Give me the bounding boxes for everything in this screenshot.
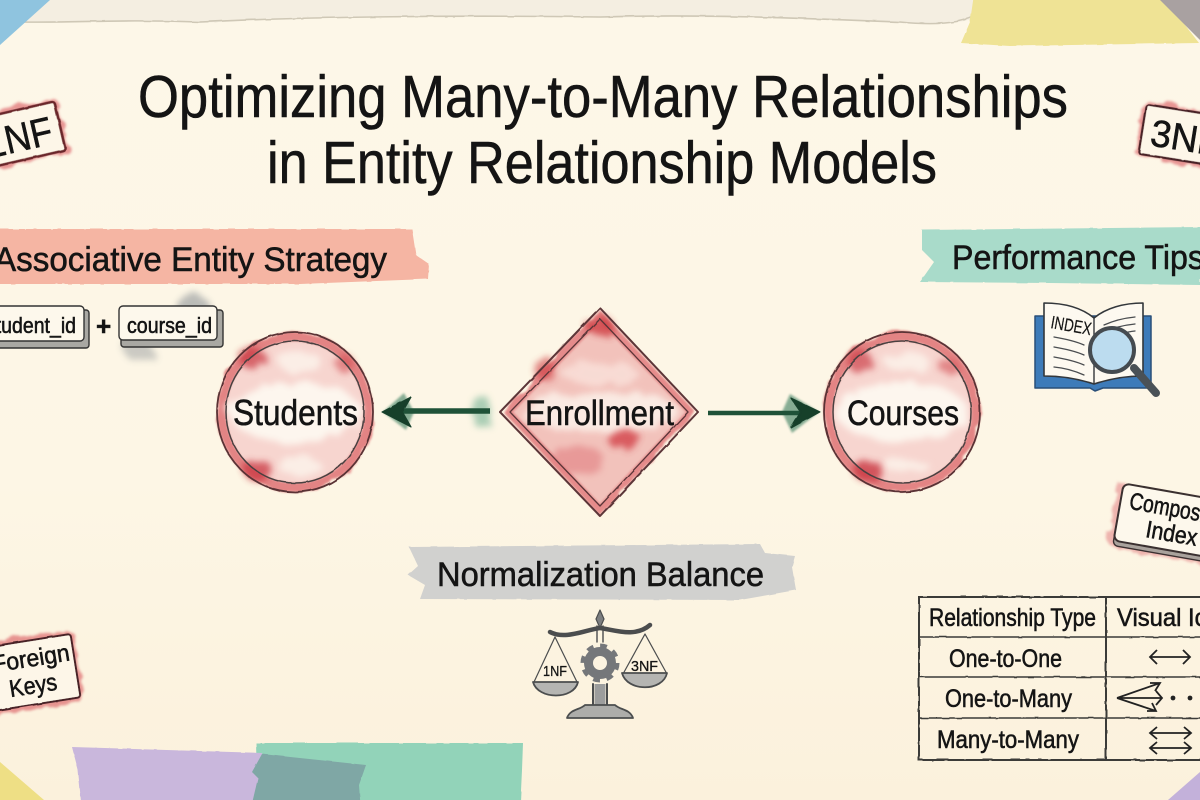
icon: balance scale with gear: 3NF <box>631 658 658 675</box>
tape: grey corner <box>1160 0 1200 40</box>
title: Optimizing Many-to-Many Relationships <box>138 64 1068 130</box>
stamp: 3NF <box>1139 104 1200 169</box>
table header: Relationship Type <box>929 604 1096 632</box>
torn paper top edge <box>0 0 980 24</box>
entity: Courses: Courses <box>847 394 959 433</box>
arrow: Enrollment to Students <box>383 393 493 430</box>
callout: Foreign Keys: Keys <box>7 669 59 703</box>
entity: Students <box>217 332 373 492</box>
entity: Students: Students <box>233 392 358 433</box>
entity: Enrollment: Enrollment <box>525 394 674 433</box>
icon: balance scale with gear: 1NF <box>543 663 567 680</box>
tape: teal bottom <box>256 743 523 800</box>
row: One-to-Many <box>945 683 1192 713</box>
callout: Foreign Keys <box>0 634 81 711</box>
icon: balance scale with gear <box>533 610 667 718</box>
tape: yellow bottom left <box>0 762 44 800</box>
key chip: student_id <box>0 306 89 348</box>
row: One-to-Many: One-to-Many <box>945 685 1072 713</box>
row: One-to-One: One-to-One <box>949 645 1062 673</box>
banner: Associative Entity Strategy: Associative Entity Strategy <box>0 241 387 279</box>
entity: Enrollment <box>500 308 698 516</box>
tape: overlap <box>250 754 366 800</box>
arrow: Enrollment to Courses <box>708 394 819 433</box>
key chip: course_id <box>119 306 223 347</box>
row: Many-to-Many <box>937 726 1191 754</box>
banner: Associative Entity Strategy <box>0 229 429 284</box>
tape: purple corner bottom right <box>1168 772 1200 800</box>
key chip: course_id: course_id <box>127 313 212 338</box>
banner: Normalization Balance: Normalization Balance <box>437 556 764 594</box>
icon: index book with magnifier: INDEX <box>1049 312 1093 339</box>
plus sign: + <box>96 311 111 341</box>
tape: yellow top right <box>961 0 1199 46</box>
tape: purple bottom <box>72 747 262 800</box>
table: relationship types <box>919 597 1200 760</box>
tape: blue corner <box>0 0 50 45</box>
icon: index book with magnifier <box>1035 303 1156 393</box>
composite key chips <box>0 294 223 359</box>
entity: Courses <box>824 332 980 492</box>
title <box>138 64 1068 196</box>
banner: Performance Tips <box>920 227 1200 285</box>
banner: Normalization Balance <box>408 544 796 600</box>
title: in Entity Relationship Models <box>267 130 937 196</box>
row: One-to-One <box>949 645 1190 673</box>
callout: Composite Index <box>1111 483 1200 565</box>
row: Many-to-Many: Many-to-Many <box>937 726 1079 754</box>
